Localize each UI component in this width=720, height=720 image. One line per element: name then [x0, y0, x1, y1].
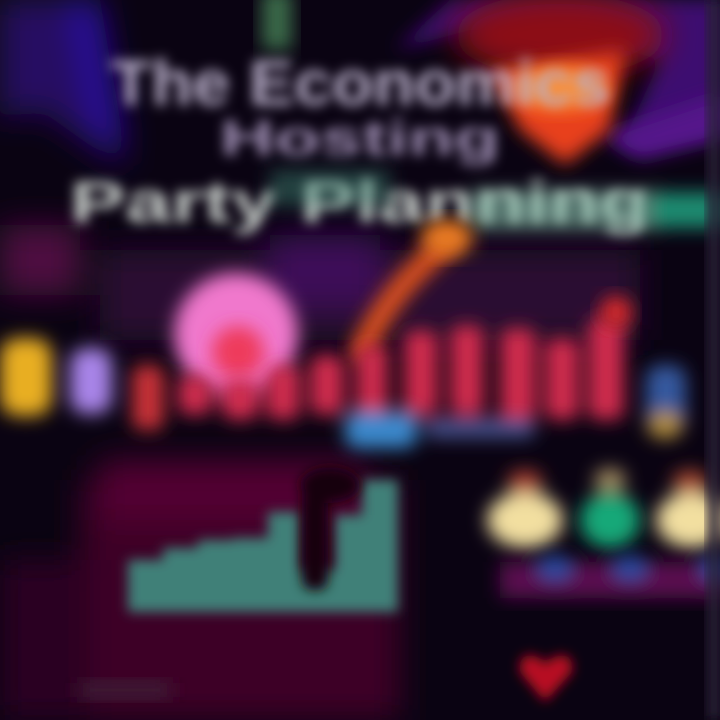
pink balloon [174, 273, 298, 397]
figure: blue [646, 365, 686, 431]
dark figure [300, 467, 360, 590]
red swirl and sun [395, 0, 720, 165]
title [70, 47, 650, 235]
cards: three people [487, 468, 720, 598]
row of figures [0, 318, 686, 448]
footer text block [80, 682, 170, 698]
accent: red tip [600, 296, 632, 328]
title: The Economics [110, 47, 610, 119]
title: Hosting [220, 110, 500, 166]
right edge strip [708, 0, 720, 720]
top green strip [262, 0, 292, 50]
orange streamer [362, 220, 473, 350]
figure: lavender [70, 348, 112, 414]
figure: yellow [0, 338, 52, 416]
card bases [500, 555, 720, 598]
card: middle [580, 468, 640, 548]
card: left [487, 470, 563, 548]
crowd: red and pink [178, 318, 624, 420]
bar chart [128, 480, 398, 612]
teal title accent [270, 170, 720, 230]
crowd: blue base [345, 412, 417, 448]
figure: red [132, 365, 164, 430]
title: Party Planning [70, 170, 650, 235]
card: right [656, 470, 720, 548]
icon: heart [520, 655, 572, 702]
